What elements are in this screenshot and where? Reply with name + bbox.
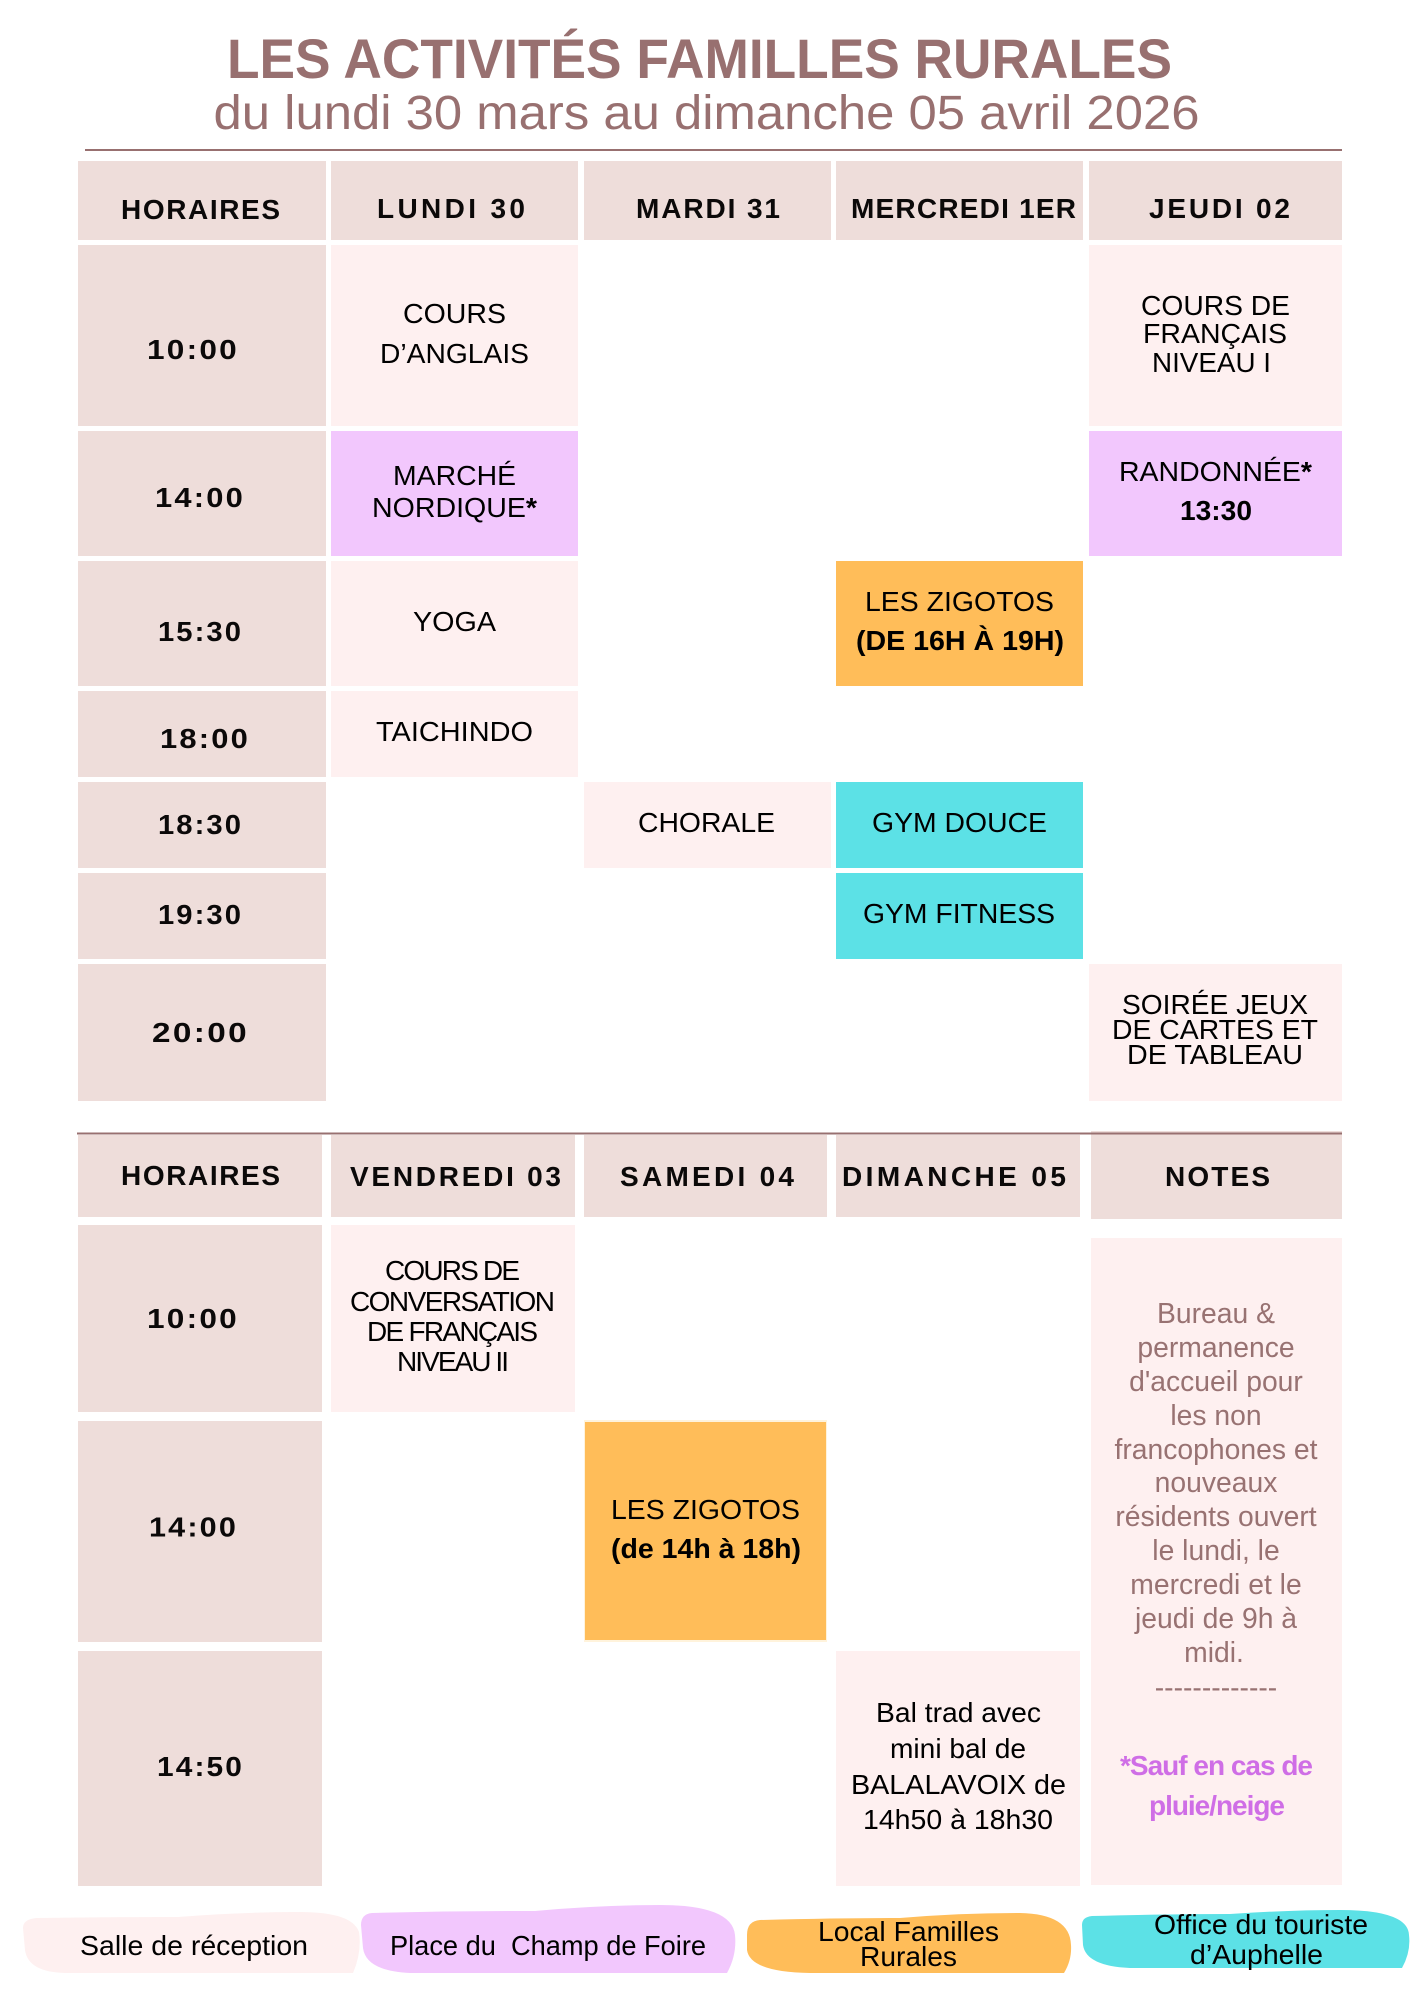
cell: chorale: [584, 782, 831, 868]
header: lundi 30: [331, 161, 578, 240]
time: 14:00: [78, 1421, 322, 1642]
notes text: les non: [1170, 1399, 1262, 1431]
time: 20:00: 20:00: [152, 1017, 249, 1048]
time: 14:00: 14:00: [155, 482, 245, 513]
header: horaires: HORAIRES: [121, 1160, 280, 1191]
cell: cours de français niveau I: FRANÇAIS: [1143, 318, 1287, 349]
cell: randonnée: RANDONNÉE*: [1119, 456, 1312, 487]
cell: cours d'anglais: [331, 245, 578, 426]
cell: bal trad: BALALAVOIX de: [851, 1769, 1066, 1800]
header: vendredi 03: VENDREDI 03: [350, 1161, 561, 1192]
cell: cours de conversation: DE FRANÇAIS: [367, 1316, 538, 1347]
panel: notes: [1091, 1238, 1342, 1885]
cell: les zigotos: LES ZIGOTOS: [865, 586, 1054, 617]
cell: soirée jeux: DE TABLEAU: [1127, 1039, 1303, 1070]
cell: marché nordique: [331, 431, 578, 556]
week 1 table: [78, 161, 1342, 1101]
time: 14:00: [78, 431, 326, 556]
cell: bal trad: 14h50 à 18h30: [863, 1804, 1053, 1835]
cell: gym fitness: [836, 873, 1083, 959]
legend: office du touriste: [1082, 1909, 1409, 1970]
cell: taichindo: [331, 691, 578, 777]
cell: randonnée: 13:30: [1180, 495, 1252, 526]
cell: cours de français niveau I: COURS DE: [1141, 290, 1290, 321]
time: 18:00: 18:00: [160, 723, 250, 754]
header: dimanche 05: [836, 1135, 1080, 1217]
cell: cours d'anglais: COURS: [403, 298, 506, 329]
time: 10:00: 10:00: [147, 334, 239, 365]
legend: local familles rurales: [747, 1913, 1071, 1973]
legend: [23, 1905, 1409, 1973]
week 2 table: [77, 1131, 1342, 1886]
cell: randonnée: [1089, 431, 1342, 556]
header: jeudi 02: [1089, 161, 1342, 240]
time: 10:00: [78, 1225, 322, 1412]
cell: les zigotos: [584, 1420, 827, 1642]
cell: yoga: YOGA: [413, 606, 496, 637]
header: horaires: [78, 161, 326, 240]
time: 10:00: 10:00: [147, 1303, 239, 1334]
legend: salle de réception: [23, 1912, 360, 1973]
header: jeudi 02: JEUDI 02: [1149, 193, 1290, 224]
cell: soirée jeux: [1089, 964, 1342, 1101]
legend: salle de réception: Salle de réception: [80, 1930, 308, 1961]
cell: gym douce: GYM DOUCE: [872, 807, 1047, 838]
notes text: permanence: [1137, 1331, 1295, 1363]
title: LES ACTIVITÉS FAMILLES RURALES: [227, 27, 1172, 90]
cell: cours de français niveau I: [1089, 245, 1342, 426]
header: mardi 31: [584, 161, 831, 240]
legend: office du touriste: Office du touriste: [1154, 1909, 1368, 1940]
cell: cours de conversation: NIVEAU II: [397, 1346, 509, 1377]
time: 15:30: [78, 561, 326, 686]
notes text: mercredi et le: [1130, 1568, 1302, 1600]
header: horaires: [78, 1135, 322, 1217]
cell: cours de conversation: CONVERSATION: [350, 1286, 555, 1317]
cell: bal trad: Bal trad avec: [876, 1697, 1041, 1728]
cell: taichindo: TAICHINDO: [376, 716, 533, 747]
cell: bal trad: mini bal de: [890, 1733, 1026, 1764]
time: 14:50: [78, 1651, 322, 1886]
cell: cours d'anglais: D’ANGLAIS: [380, 338, 529, 369]
cell: soirée jeux: SOIRÉE JEUX: [1122, 989, 1308, 1020]
subtitle: dates: du lundi 30 mars au dimanche 05 avril 2026: [214, 87, 1200, 140]
cell: les zigotos: (DE 16H À 19H): [856, 625, 1064, 656]
cell: les zigotos: [836, 561, 1083, 686]
cell: gym douce: [836, 782, 1083, 868]
cell: cours de conversation: COURS DE: [385, 1255, 520, 1286]
notes text: d'accueil pour: [1129, 1365, 1303, 1397]
time: 15:30: 15:30: [158, 616, 243, 647]
cell: cours de conversation: [331, 1225, 575, 1412]
time: 18:30: [78, 782, 326, 868]
cell: yoga: [331, 561, 578, 686]
cell: cours de français niveau I: NIVEAU I: [1152, 347, 1271, 378]
cell: soirée jeux: DE CARTES ET: [1112, 1014, 1318, 1045]
time: 10:00: [78, 245, 326, 426]
time: 18:30: 18:30: [158, 809, 243, 840]
header: mercredi 1er: [836, 161, 1083, 240]
time: 20:00: [78, 964, 326, 1101]
notes text: résidents ouvert: [1115, 1500, 1317, 1532]
header: notes: NOTES: [1165, 1161, 1270, 1192]
header: mercredi 1er: MERCREDI 1ER: [851, 193, 1076, 224]
time: 19:30: 19:30: [158, 899, 243, 930]
note: sauf en cas de pluie: [1120, 1750, 1313, 1821]
note: sauf en cas de pluie: *Sauf en cas de: [1120, 1750, 1313, 1781]
cell: gym fitness: GYM FITNESS: [863, 898, 1055, 929]
notes text: jeudi de 9h à: [1134, 1602, 1297, 1634]
legend: local familles rurales: Local Familles: [818, 1916, 999, 1947]
note: sauf en cas de pluie: pluie/neige: [1149, 1790, 1285, 1821]
notes text: nouveaux: [1155, 1466, 1277, 1498]
cell: marché nordique: MARCHÉ: [393, 460, 516, 491]
header: vendredi 03: [331, 1135, 575, 1217]
header: lundi 30: LUNDI 30: [377, 193, 525, 224]
cell: les zigotos: (de 14h à 18h): [611, 1533, 801, 1564]
cell: bal trad: [836, 1651, 1080, 1886]
time: 14:50: 14:50: [157, 1751, 244, 1782]
legend: place du champ de foire: [361, 1905, 735, 1973]
notes text: [1115, 1297, 1318, 1703]
header: notes: [1091, 1131, 1342, 1219]
time: 19:30: [78, 873, 326, 959]
header: samedi 04: [584, 1135, 827, 1217]
time: 18:00: [78, 691, 326, 777]
header: samedi 04: SAMEDI 04: [620, 1161, 794, 1192]
notes text: francophones et: [1115, 1433, 1318, 1465]
notes text: midi.: [1184, 1636, 1244, 1668]
cell: les zigotos: LES ZIGOTOS: [611, 1494, 800, 1525]
header: horaires: HORAIRES: [121, 194, 280, 225]
legend: local familles rurales: Rurales: [860, 1941, 957, 1972]
header: dimanche 05: DIMANCHE 05: [842, 1161, 1066, 1192]
legend: place du champ de foire: Place du Champ de Foire: [390, 1930, 706, 1961]
legend: office du touriste: d’Auphelle: [1190, 1939, 1323, 1970]
notes text: -------------: [1155, 1671, 1277, 1703]
cell: marché nordique: NORDIQUE*: [372, 492, 537, 523]
time: 14:00: 14:00: [149, 1512, 238, 1542]
notes text: le lundi, le: [1152, 1534, 1280, 1566]
cell: chorale: CHORALE: [638, 807, 775, 838]
header: mardi 31: MARDI 31: [636, 193, 780, 224]
notes text: Bureau &: [1157, 1297, 1275, 1329]
